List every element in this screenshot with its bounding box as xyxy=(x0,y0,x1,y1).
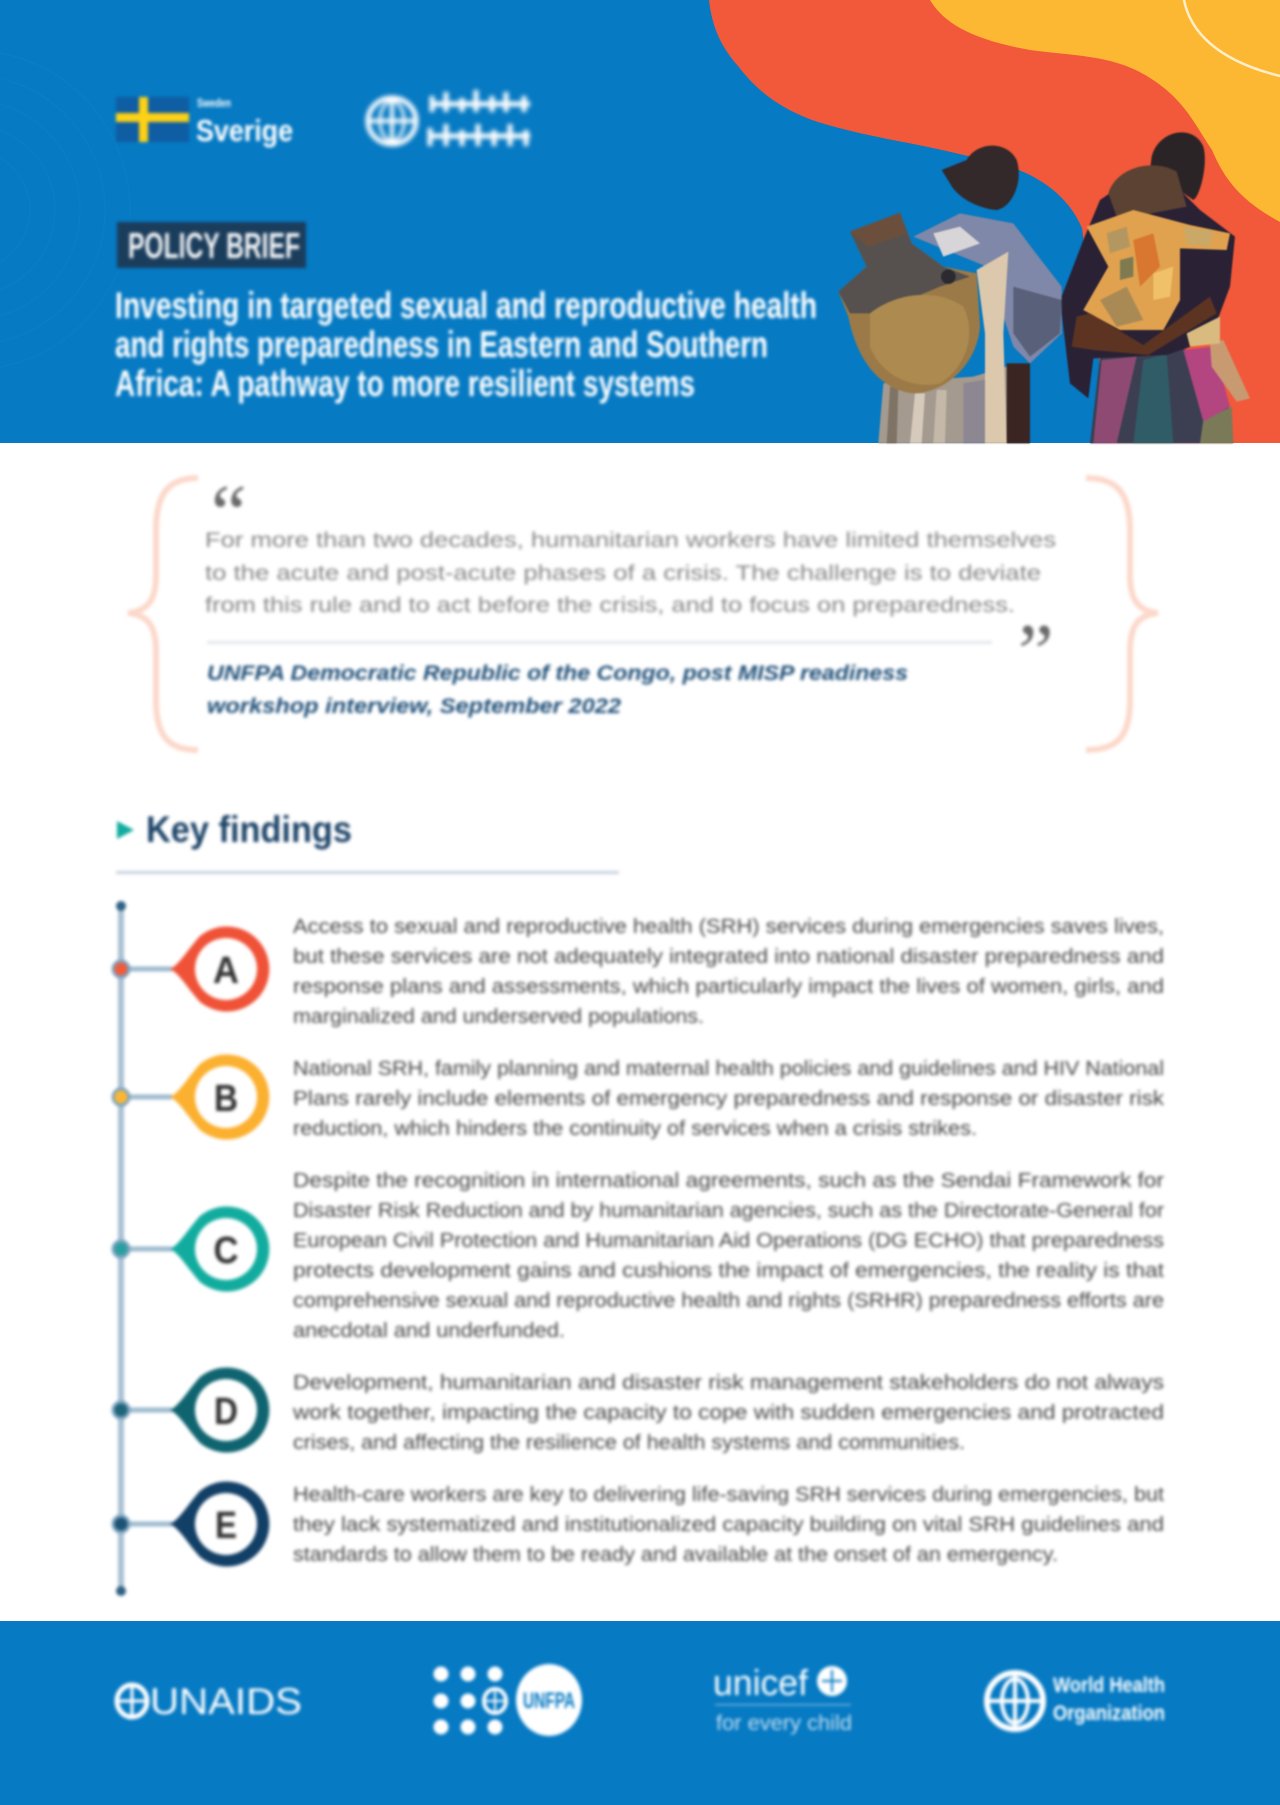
panel: header banner xyxy=(0,0,1280,443)
orange wave shape xyxy=(709,0,1280,443)
logo: UNAIDS: UNAIDS xyxy=(150,1681,302,1722)
woman with pot xyxy=(838,146,1062,443)
text C: Despite the recognition in international agreements, such as the Sendai Framework for xyxy=(293,1170,1164,1192)
text D: Development, humanitarian and disaster risk management stakeholders do not always xyxy=(293,1372,1164,1394)
white curve on yellow xyxy=(1184,0,1280,76)
text C: comprehensive sexual and reproductive health and rights (SRHR) preparedness efforts are xyxy=(293,1290,1164,1312)
text B: Plans rarely include elements of emergency preparedness and response or disaster risk xyxy=(293,1088,1165,1110)
text B: National SRH, family planning and maternal health policies and guidelines and HIV National xyxy=(293,1058,1164,1080)
logo: United Nations emblem with local-script wordmark xyxy=(368,90,530,146)
finding A xyxy=(113,916,1164,1028)
closing quotation mark: ” xyxy=(1018,609,1054,697)
quote source: UNFPA Democratic Republic of the Congo, post MISP readiness xyxy=(207,661,908,685)
marker E: E xyxy=(215,1505,237,1547)
logo: World Health Organization xyxy=(987,1672,1165,1730)
text A: but these services are not adequately integrated into national disaster preparedness and xyxy=(293,946,1164,968)
quote source xyxy=(207,661,908,718)
title: Africa: A pathway to more resilient systems xyxy=(115,363,695,404)
quote text xyxy=(205,528,1056,617)
woman carrying child xyxy=(1062,132,1250,443)
right brace xyxy=(1086,478,1158,750)
quote text: from this rule and to act before the crisis, and to focus on preparedness. xyxy=(205,593,1015,617)
text C: protects development gains and cushions the impact of emergencies, the reality is that xyxy=(293,1260,1164,1282)
marker C: C xyxy=(214,1230,238,1272)
finding B xyxy=(113,1054,1165,1140)
badge: policy brief xyxy=(117,222,306,268)
illustration: two women seen from behind, one carrying a clay pot, one a child xyxy=(838,132,1250,443)
finding E xyxy=(113,1482,1164,1566)
logo: UNICEF xyxy=(713,1662,852,1735)
text B: reduction, which hinders the continuity of services when a crisis strikes. xyxy=(293,1118,977,1140)
text A xyxy=(293,916,1164,1028)
wordmark: Sverige xyxy=(196,113,293,148)
marker A: A xyxy=(213,950,239,992)
text B xyxy=(293,1058,1165,1140)
marker B: B xyxy=(214,1078,238,1120)
text C: European Civil Protection and Humanitarian Aid Operations (DG ECHO) that preparedness xyxy=(293,1230,1164,1252)
marker D: D xyxy=(214,1391,238,1433)
finding D xyxy=(113,1368,1164,1454)
timeline spine xyxy=(116,901,126,1596)
text A: marginalized and underserved populations. xyxy=(293,1006,704,1028)
logo: UNICEF: for every child xyxy=(716,1712,852,1735)
text C xyxy=(293,1170,1164,1342)
text A: Access to sexual and reproductive health (SRH) services during emergencies saves lives, xyxy=(293,916,1164,938)
marker A xyxy=(113,926,269,1012)
quote text: to the acute and post-acute phases of a crisis. The challenge is to deviate xyxy=(205,561,1041,585)
badge: policy brief: POLICY BRIEF xyxy=(128,225,300,266)
logo: Sweden flag and wordmark xyxy=(116,96,293,148)
opening quotation mark: “ xyxy=(211,470,247,558)
marker E xyxy=(113,1482,269,1566)
logo: UNFPA xyxy=(434,1664,582,1736)
yellow wave shape xyxy=(930,0,1280,222)
marker B xyxy=(113,1054,269,1140)
text D xyxy=(292,1372,1164,1454)
quote text: For more than two decades, humanitarian workers have limited themselves xyxy=(205,528,1056,552)
title: Investing in targeted sexual and reproductive health xyxy=(115,285,817,326)
left brace xyxy=(128,478,198,750)
title: and rights preparedness in Eastern and Southern xyxy=(115,324,768,365)
heading: key findings: Key findings xyxy=(146,809,352,850)
text E xyxy=(293,1484,1164,1566)
text A: response plans and assessments, which particularly impact the lives of women, girls, and xyxy=(293,976,1164,998)
quote source: workshop interview, September 2022 xyxy=(207,694,621,718)
text E: they lack systematized and institutionalized capacity building on vital SRH guidelines and xyxy=(293,1514,1164,1536)
logo: World Health Organization: Organization xyxy=(1053,1702,1165,1725)
panel: quote xyxy=(128,470,1158,750)
text D: work together, impacting the capacity to cope with sudden emergencies and protracted xyxy=(292,1402,1164,1424)
text C: Disaster Risk Reduction and by humanitarian agencies, such as the Directorate-General for xyxy=(293,1200,1164,1222)
panel: footer with partner logos xyxy=(0,1621,1280,1805)
marker D xyxy=(113,1368,269,1452)
text E: standards to allow them to be ready and available at the onset of an emergency. xyxy=(293,1544,1058,1566)
flag of Sweden xyxy=(116,97,189,142)
text D: crises, and affecting the resilience of health systems and communities. xyxy=(293,1432,965,1454)
logo: World Health Organization: World Health xyxy=(1053,1674,1165,1697)
wordmark: Sweden xyxy=(197,96,231,110)
marker C xyxy=(113,1206,269,1292)
text C: anecdotal and underfunded. xyxy=(293,1320,565,1342)
logo: UNICEF: unicef xyxy=(713,1662,809,1703)
wordmark xyxy=(196,96,293,148)
logo: UNFPA: UNFPA xyxy=(523,1688,575,1713)
heading: key findings xyxy=(116,809,619,874)
finding C xyxy=(113,1170,1164,1342)
title xyxy=(115,285,817,404)
text E: Health-care workers are key to delivering life-saving SRH services during emergencies, but xyxy=(293,1484,1164,1506)
